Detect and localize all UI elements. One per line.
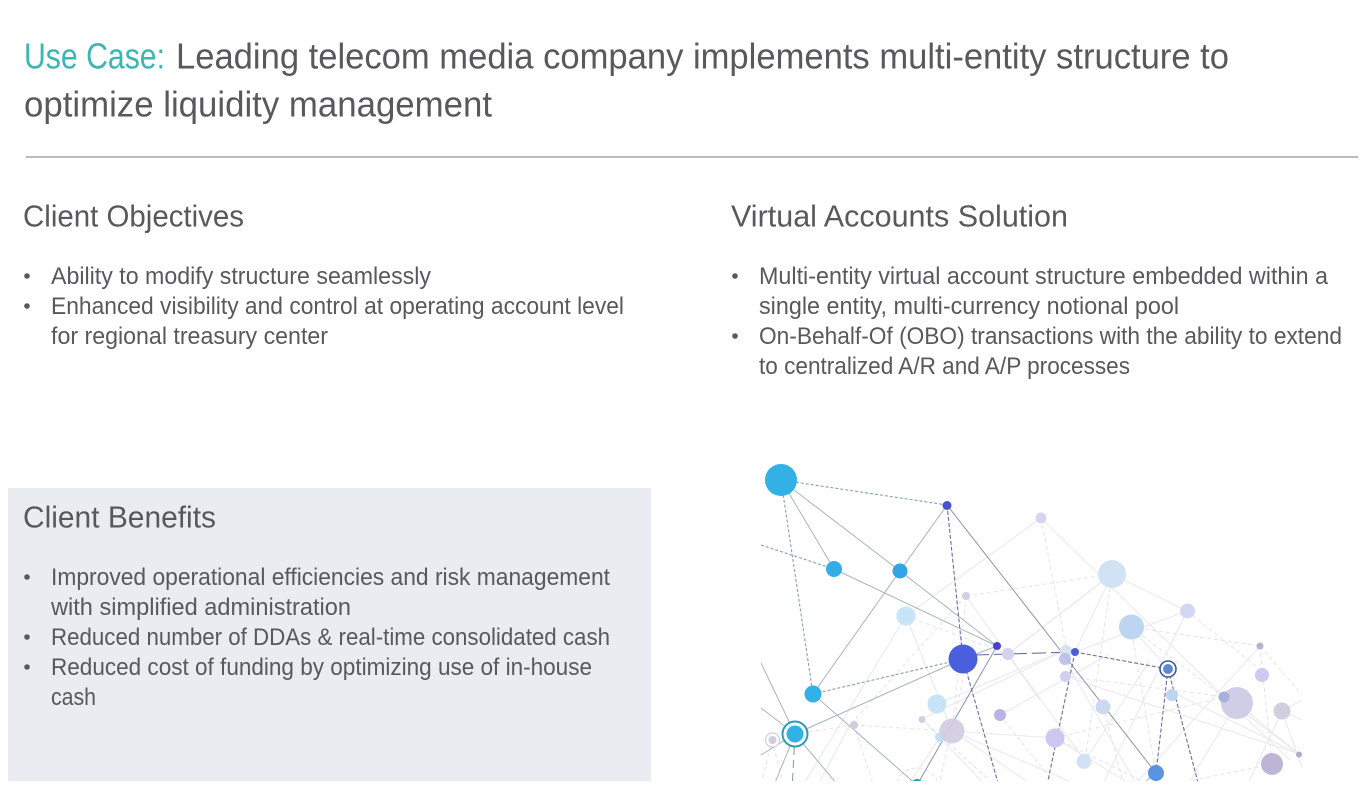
panel: virtual accounts solution — [731, 198, 1342, 380]
list: client objectives: Enhanced visibility and control at operating account level — [51, 293, 624, 320]
list: client objectives: Ability to modify structure seamlessly — [51, 263, 431, 290]
title — [24, 36, 1229, 124]
list: client benefits — [24, 564, 610, 711]
list: virtual accounts solution: to centralized A/R and A/P processes — [759, 353, 1130, 380]
list: client benefits: Reduced cost of funding by optimizing use of in-house — [51, 654, 592, 681]
list: virtual accounts solution — [732, 263, 1342, 380]
heading: client benefits: Client Benefits — [23, 500, 216, 534]
title: Use Case: — [24, 36, 165, 76]
network graphic — [760, 464, 1310, 785]
list: client benefits: Improved operational efficiencies and risk management — [51, 564, 610, 591]
list: client benefits: Reduced number of DDAs & real-time consolidated cash — [51, 624, 610, 651]
heading: virtual accounts solution: Virtual Accounts Solution — [731, 198, 1068, 234]
list: virtual accounts solution: single entity, multi-currency notional pool — [759, 293, 1179, 320]
list: virtual accounts solution: On-Behalf-Of (OBO) transactions with the ability to extend — [759, 323, 1342, 350]
heading: client objectives: Client Objectives — [23, 198, 244, 234]
list: virtual accounts solution: Multi-entity virtual account structure embedded within a — [759, 263, 1329, 290]
title: optimize liquidity management — [24, 84, 492, 124]
bright nodes — [765, 464, 1176, 785]
list: client objectives — [24, 263, 624, 350]
list: client objectives: for regional treasury center — [51, 323, 328, 350]
faint nodes — [766, 512, 1302, 775]
list: client benefits: with simplified administration — [50, 594, 351, 621]
title: Leading telecom media company implements multi-entity structure to — [176, 36, 1229, 76]
panel: client benefits — [8, 488, 651, 781]
list: client benefits: cash — [51, 684, 96, 711]
panel: client objectives — [23, 198, 624, 350]
